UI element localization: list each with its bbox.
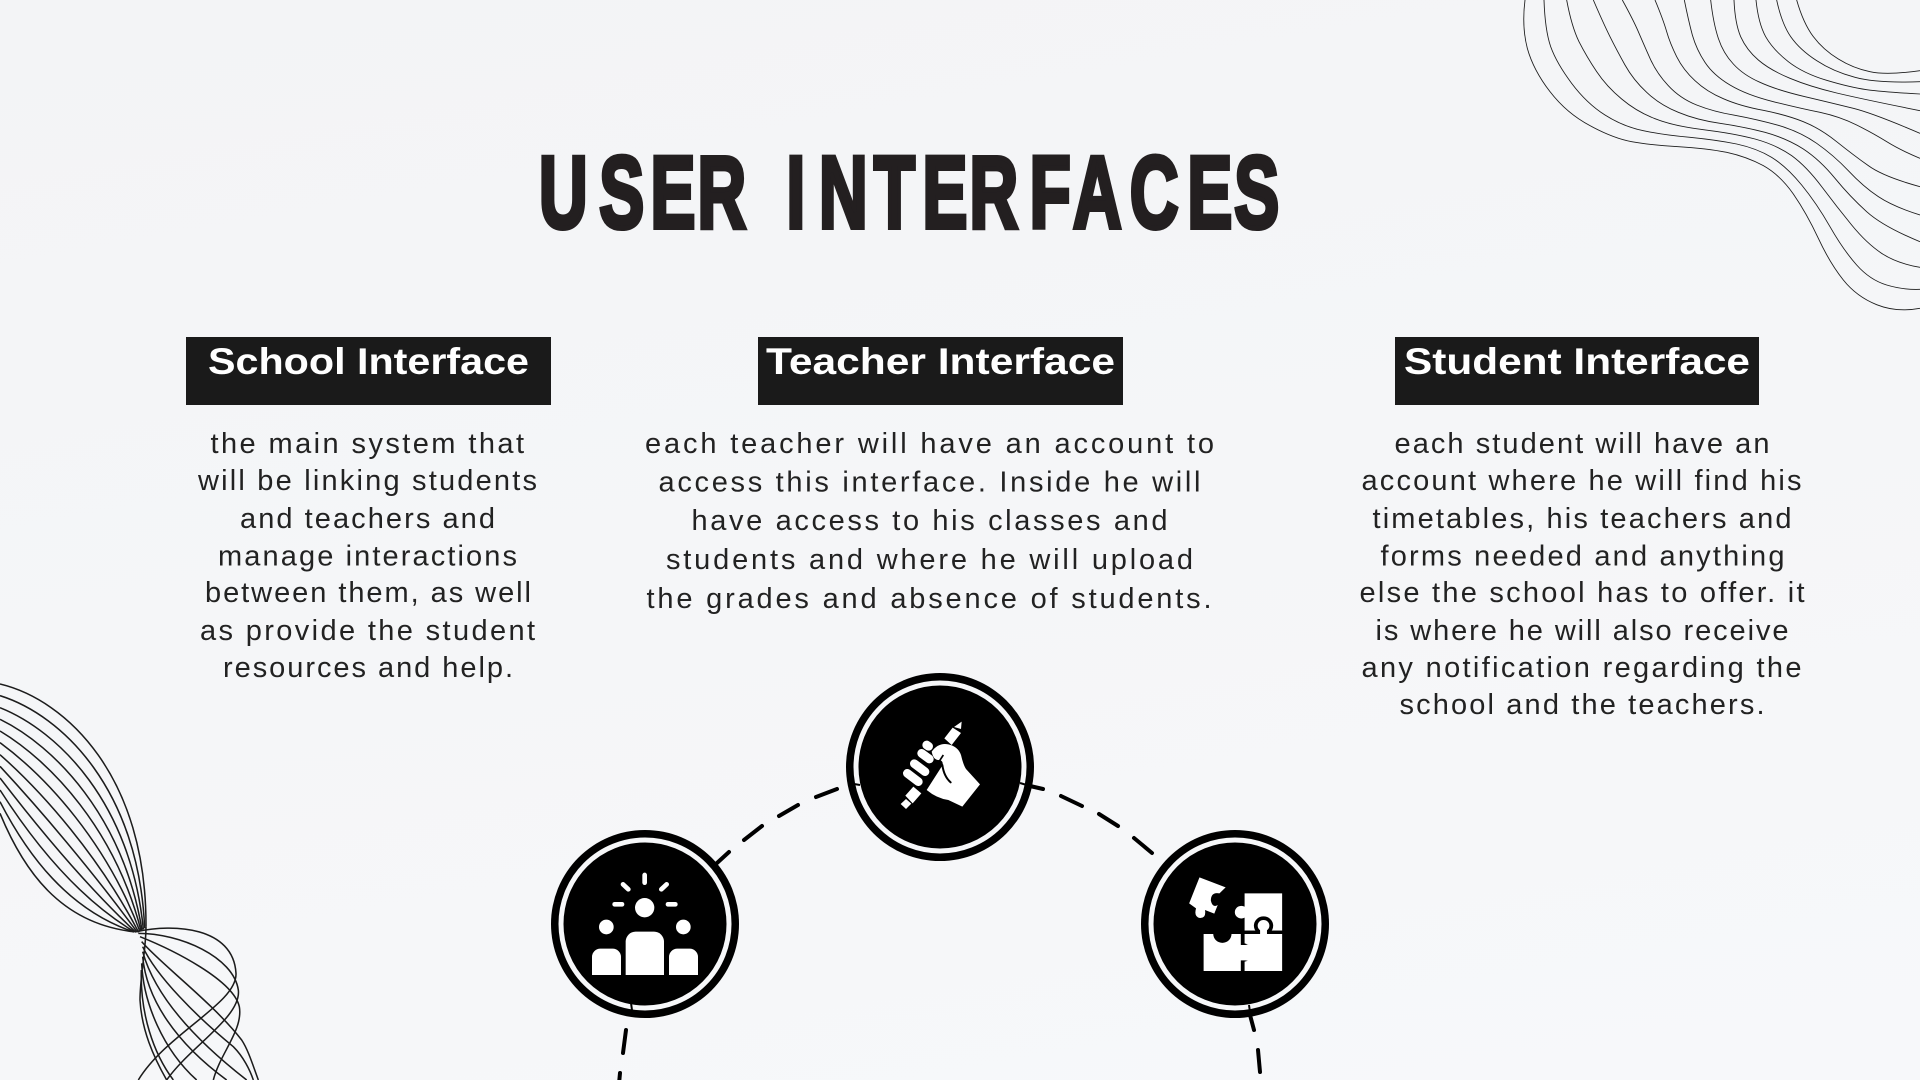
text block: student description: is where he will also receive [1376,615,1788,647]
text block: school description: resources and help. [223,652,513,684]
text block: student description: each student will have an [1394,428,1770,460]
heading: school interface [186,337,551,405]
text block: teacher description: each teacher will have an account to [645,428,1214,460]
text block: student description: school and the teachers. [1400,689,1764,721]
text block: school description: as provide the student [200,615,535,647]
text block: school description: manage interactions [218,540,517,572]
wave lines: bottom left [0,684,258,1080]
text block: teacher description: access this interface. Inside he will [658,466,1200,498]
icon: hand holding pencil in circle [846,673,1034,861]
text block: school description: will be linking students [197,465,537,497]
icon: people group in circle [551,830,739,1018]
text block: teacher description [645,428,1214,615]
text block: student description [1360,428,1804,721]
heading: student interface: Student Interface [1404,341,1750,382]
panel: teacher interface [645,337,1214,615]
text block: student description: else the school has to offer. it [1360,577,1804,609]
text block: student description: forms needed and anything [1380,540,1784,572]
text block: teacher description: students and where he will upload [666,544,1193,576]
panel: student interface [1360,337,1804,721]
heading: school interface: School Interface [208,341,529,382]
text block: school description: the main system that [210,428,524,460]
heading: teacher interface [758,337,1123,405]
text block: school description: and teachers and [240,503,495,535]
dashed connector arc [619,786,1260,1080]
icon: puzzle pieces in circle [1141,830,1329,1018]
text block: student description: account where he will find his [1362,465,1802,497]
title: USER INTERFACES [539,137,1279,250]
text block: teacher description: have access to his classes and [692,505,1168,537]
panel: school interface [186,337,551,684]
heading: teacher interface: Teacher Interface [766,341,1115,382]
wave lines: top right [1524,0,1920,310]
text block: student description: any notification regarding the [1362,652,1802,684]
text block: teacher description: the grades and absence of students. [646,583,1212,615]
heading: student interface [1395,337,1759,405]
text block: school description [197,428,537,684]
text block: school description: between them, as well [205,577,531,609]
text block: student description: timetables, his teachers and [1372,503,1792,535]
